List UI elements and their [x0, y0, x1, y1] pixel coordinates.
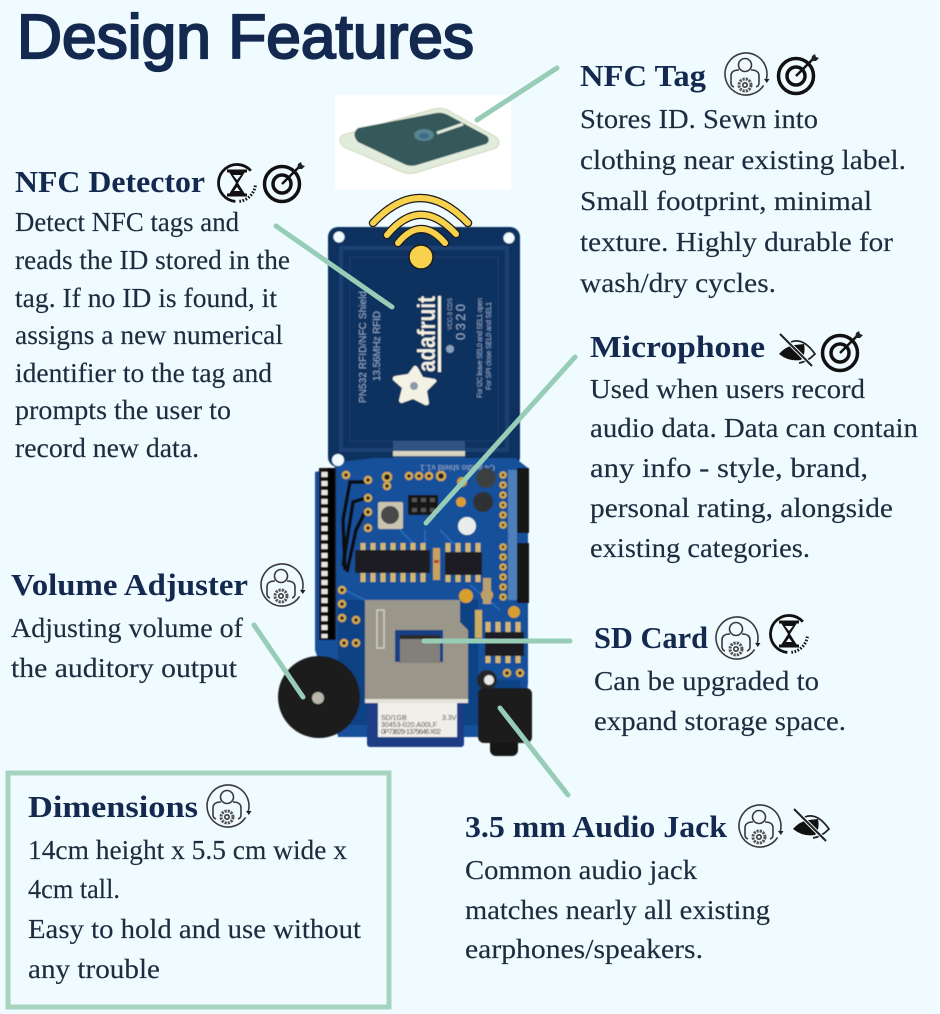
text: Microphone description: any info - style, brand, [590, 453, 868, 483]
icon: target [822, 331, 863, 370]
connector line: NFC tag [477, 68, 557, 120]
text: NFC Detector description: tag. If no ID is found, it [15, 283, 278, 313]
text: NFC Tag description: clothing near existing label. [580, 145, 906, 175]
image: circuit board device [278, 227, 532, 756]
connector line: volume adjuster [254, 625, 303, 697]
header pins right [500, 468, 529, 603]
text: SD Card description: Can be upgraded to [594, 666, 819, 696]
text: NFC Tag description: Small footprint, minimal [580, 186, 872, 216]
connector line: SD card [424, 638, 570, 644]
heading: NFC Tag: NFC Tag [580, 58, 707, 93]
text: Dimensions description [28, 835, 362, 984]
text: NFC Detector description: identifier to the tag and [15, 358, 273, 388]
socket header [408, 495, 438, 515]
text: Dimensions description: any trouble [28, 954, 160, 984]
SD card: SD/1GB [381, 715, 407, 722]
SD card: 0P73829-1375646 X02 [381, 729, 441, 736]
panel: SD Card [594, 609, 846, 736]
NFC shield board: PN532 RFID/NFC Shield [358, 291, 369, 403]
header pins left [319, 468, 336, 640]
panel border [8, 773, 389, 1007]
volume knob [278, 656, 360, 738]
audio jack [478, 688, 532, 756]
NFC shield board: For SPI close SEL0 and SEL1 [486, 302, 493, 390]
text: Dimensions description: Easy to hold and use without [28, 914, 362, 944]
text: SD Card description [594, 666, 846, 736]
panel: Volume Adjuster [11, 556, 311, 683]
text: Audio Jack description [465, 855, 770, 964]
NFC shield board: 0320 [453, 304, 468, 340]
icon: user settings [253, 556, 311, 614]
capacitors and resistors [433, 468, 520, 690]
heading: SD Card: SD Card [594, 620, 708, 655]
NFC shield board: For I2C leave SEL0 and SEL1 open [477, 298, 484, 398]
connector line: NFC detector [276, 226, 392, 307]
icon: user settings [708, 609, 766, 667]
panel: 3.5 mm Audio Jack [465, 797, 829, 964]
SD card: 30453-020.A00LF [381, 722, 437, 729]
heading: Microphone: Microphone [590, 329, 765, 364]
icon: crossed eye [793, 809, 829, 841]
panel: NFC Tag [580, 45, 906, 298]
text: NFC Detector description [15, 207, 290, 463]
text: Audio Jack description: earphones/speakers. [465, 934, 703, 964]
text: Volume Adjuster description [11, 613, 243, 683]
text: Microphone description: Used when users record [590, 374, 866, 404]
icon: hourglass [216, 162, 258, 204]
text: Audio Jack description: Common audio jack [465, 855, 698, 885]
text: NFC Detector description: Detect NFC tags and [15, 207, 239, 237]
text: SD Card description: expand storage space. [594, 706, 846, 736]
text: Microphone description: existing categories. [590, 533, 810, 563]
heading: NFC Detector: NFC Detector [15, 164, 205, 199]
text: Volume Adjuster description: Adjusting volume of [11, 613, 243, 643]
title: Design Features [17, 3, 474, 72]
text: NFC Tag description: texture. Highly durable for [580, 227, 893, 257]
text: Microphone description [590, 374, 919, 563]
audio shield board [315, 454, 528, 737]
NFC shield board [328, 227, 520, 467]
push button [378, 502, 403, 529]
SD card [367, 703, 464, 747]
text: Microphone description: audio data. Data can contain [590, 413, 919, 443]
audio shield board: C4 Audio shield v1.1 [419, 463, 495, 472]
text: NFC Tag description: Stores ID. Sewn into [580, 104, 818, 134]
through holes [339, 472, 523, 676]
icon: target [264, 162, 305, 202]
text: NFC Detector description: reads the ID stored in the [15, 245, 290, 275]
panel: Dimensions [8, 773, 389, 1007]
NFC shield board: VCC-3 CDS [448, 298, 454, 330]
image: NFC tag photo [335, 95, 511, 190]
icon: user settings [199, 777, 257, 835]
chips [355, 543, 524, 663]
text: NFC Detector description: assigns a new numerical [15, 320, 283, 350]
icon: target [778, 54, 819, 94]
text: Dimensions description: 14cm height x 5.5 cm wide x [28, 835, 347, 865]
connector line: microphone [426, 357, 575, 523]
text: Microphone description: personal rating, alongside [590, 493, 893, 523]
icon: yellow wifi signal [373, 198, 468, 269]
SD card: 3.3V [442, 715, 457, 722]
heading: Volume Adjuster: Volume Adjuster [11, 567, 248, 602]
text: NFC Detector description: record new data. [15, 433, 199, 463]
heading: Dimensions: Dimensions [28, 789, 198, 824]
jumper wires [343, 482, 367, 572]
icon: user settings [731, 797, 789, 855]
text: Volume Adjuster description: the auditory output [11, 653, 238, 683]
NFC shield board: 13.56MHz RFID [372, 311, 383, 381]
NFC shield board: adafruit [413, 295, 441, 372]
text: Audio Jack description: matches nearly all existing [465, 895, 770, 925]
panel: NFC Detector [15, 162, 305, 463]
icon: crossed eye [779, 334, 815, 366]
text: NFC Tag description: wash/dry cycles. [580, 268, 776, 298]
text: NFC Detector description: prompts the user to [15, 395, 231, 425]
text: Dimensions description: 4cm tall. [28, 874, 120, 904]
icon: user settings [717, 45, 775, 103]
icon: hourglass [768, 613, 810, 655]
SD card slot [365, 600, 468, 703]
heading: 3.5 mm Audio Jack: 3.5 mm Audio Jack [465, 809, 728, 844]
text: NFC Tag description [580, 104, 906, 298]
panel: Microphone [590, 329, 919, 563]
connector line: audio jack [500, 708, 568, 795]
